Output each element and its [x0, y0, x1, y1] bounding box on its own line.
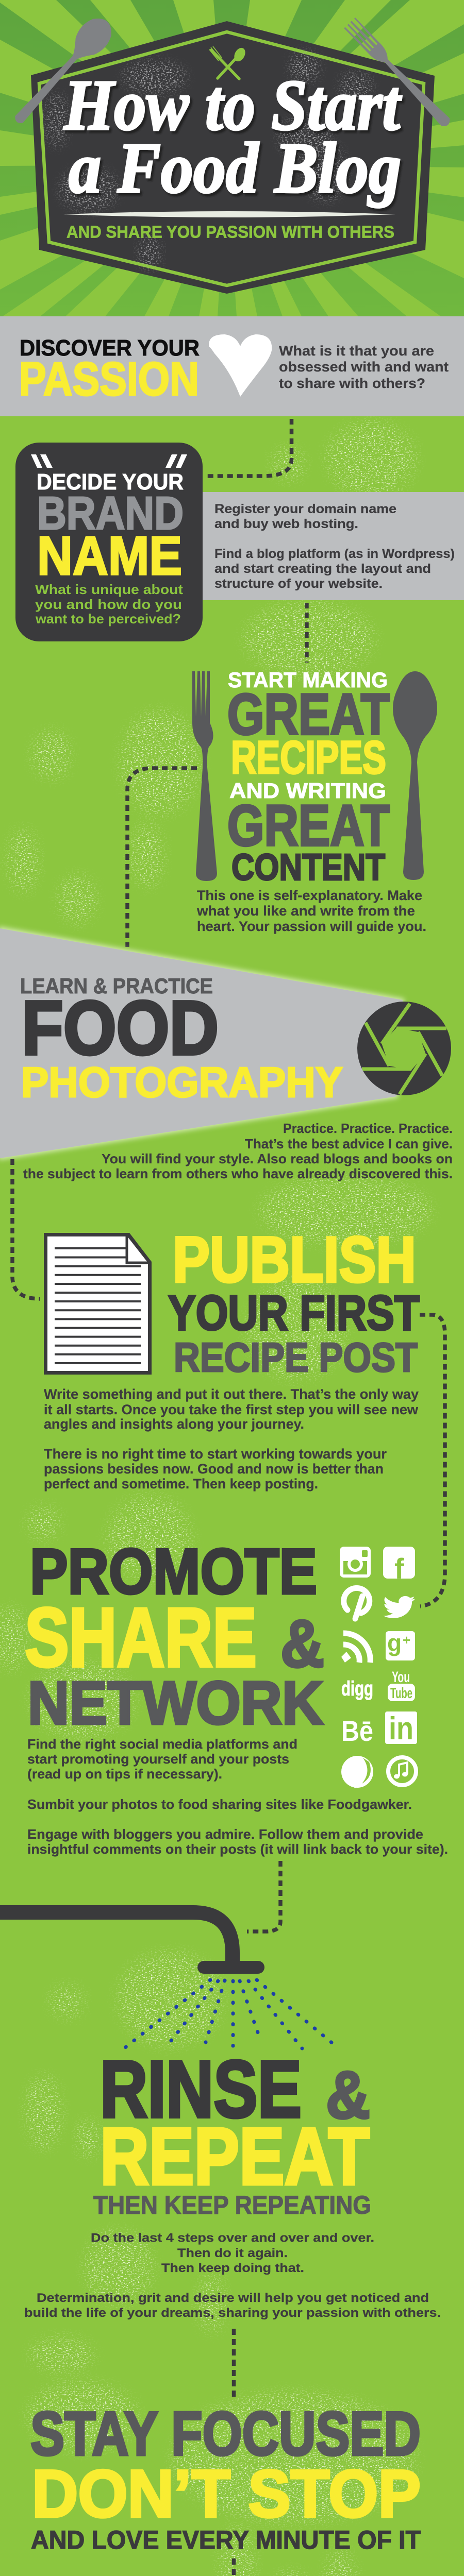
text block: (read up on tips if necessary).	[27, 1766, 222, 1782]
icon: google plus	[386, 1630, 415, 1660]
panel: promote share network	[25, 1536, 448, 1857]
heading: START MAKING	[228, 668, 388, 692]
heading: GREAT	[227, 793, 390, 858]
sunburst rays	[0, 0, 464, 316]
text block: This one is self-explanatory. Make	[197, 888, 422, 903]
heading: DECIDE YOUR	[37, 470, 184, 495]
text block	[214, 502, 455, 591]
question text: you and how do you	[35, 597, 182, 612]
icon: speech bubble	[341, 1756, 373, 1788]
icon: small crossed fork and spoon	[209, 46, 247, 79]
heading: NAME	[37, 526, 182, 586]
arrow: dotted connector 1	[206, 419, 292, 476]
text block: Determination, grit and desire will help you get noticed and	[37, 2291, 429, 2305]
heading: PROMOTE	[30, 1536, 317, 1607]
arrow: dotted connector 4	[12, 1159, 40, 1299]
text block	[44, 1386, 419, 1492]
icon: itunes	[388, 1757, 416, 1785]
icon: heart	[209, 334, 272, 397]
heading: PUBLISH	[173, 1224, 416, 1296]
panel: great recipes and content	[192, 668, 437, 934]
swoosh divider	[63, 211, 395, 217]
icon: youtube: Tube	[390, 1685, 412, 1702]
heading: RECIPE POST	[174, 1334, 418, 1380]
heading	[227, 668, 390, 888]
icon: youtube: You	[392, 1669, 410, 1686]
panel: discover your passion	[0, 316, 464, 416]
panel: stay focused: AND LOVE EVERY MINUTE OF IT	[31, 2526, 421, 2554]
heading	[20, 974, 343, 1106]
question text: What is unique about	[35, 582, 183, 597]
icon: google plus: g	[387, 1630, 402, 1656]
text block: and start creating the layout and	[214, 562, 431, 576]
icon: camera aperture	[357, 1002, 451, 1095]
title text: a Food Blog	[69, 128, 401, 208]
icon: large fork	[344, 18, 454, 130]
icon: behance: Bē	[341, 1715, 373, 1747]
text block: Do the last 4 steps over and over and over.	[91, 2231, 374, 2245]
text block: There is no right time to start working towards your	[44, 1446, 387, 1462]
panel: publish	[44, 1224, 420, 1492]
hexagon badge	[31, 21, 435, 294]
text block: and buy web hosting.	[214, 517, 358, 531]
heading	[37, 470, 184, 586]
text block: heart. Your passion will guide you.	[197, 919, 426, 934]
heading: NETWORK	[28, 1669, 323, 1737]
heading: GREAT	[227, 682, 390, 747]
text block: what you like and write from the	[196, 903, 415, 919]
arrow: dotted connector 7	[232, 2329, 236, 2398]
icon: facebook: f	[394, 1552, 404, 1585]
heading: PHOTOGRAPHY	[21, 1058, 343, 1106]
text block: practice: You will find your style. Also read blogs and books on	[102, 1151, 453, 1166]
text block: Find the right social media platforms and	[27, 1736, 297, 1752]
heading: BRAND	[37, 488, 184, 539]
icon: large spoon	[5, 11, 119, 132]
title text: How to Start	[63, 65, 402, 145]
text block: build the life of your dreams, sharing your passion with others.	[24, 2306, 441, 2320]
icon: twitter	[383, 1596, 415, 1618]
social icons	[340, 1547, 417, 1788]
heading: REPEAT	[100, 2111, 370, 2202]
icon: digg: digg	[341, 1677, 373, 1700]
text block: it all starts. Once you take the first step you will see new	[44, 1402, 419, 1417]
heading: FOOD	[22, 986, 219, 1071]
text block: obsessed with and want	[279, 359, 449, 375]
icon: pinterest	[344, 1588, 370, 1619]
heading: THEN KEEP REPEATING	[93, 2191, 371, 2219]
text block: to share with others?	[279, 376, 425, 391]
text block: Find a blog platform (as in Wordpress)	[214, 547, 455, 561]
arrow: dotted connector 3	[127, 768, 197, 947]
panel: food photography	[0, 928, 451, 1158]
text block	[279, 343, 449, 391]
text block: Register your domain name	[214, 502, 396, 516]
question text: want to be perceived?	[35, 611, 181, 626]
heading: LEARN & PRACTICE	[20, 974, 213, 998]
title badge	[5, 11, 454, 294]
heading	[25, 1536, 324, 1737]
heading: SHARE	[25, 1591, 257, 1684]
arrow: dotted connector 6	[247, 1861, 280, 1931]
text block: Write something and put it out there. That’s the only way	[44, 1386, 419, 1402]
subtitle: AND SHARE YOU PASSION WITH OTHERS	[67, 223, 394, 241]
text block: Then keep doing that.	[161, 2261, 304, 2275]
icon: rss	[341, 1633, 370, 1663]
heading: YOUR FIRST	[168, 1285, 420, 1341]
icon: fork	[192, 671, 217, 881]
text block: insightful comments on their posts (it will link back to your site).	[27, 1841, 448, 1857]
badge chalk texture	[46, 53, 371, 268]
arrow: dotted connector 8	[232, 2558, 236, 2576]
icon: quotation marks	[31, 454, 187, 468]
panel: decide your brand name	[15, 443, 203, 641]
heading: &	[280, 1606, 324, 1681]
text block: structure of your website.	[214, 577, 383, 591]
heading: PASSION	[19, 353, 199, 405]
icon: linkedin: in	[389, 1711, 413, 1747]
heading	[19, 336, 200, 405]
heading: RINSE	[100, 2044, 302, 2134]
chalk texture	[0, 422, 430, 2576]
text block: practice: the subject to learn from others who have already discovered this.	[23, 1166, 453, 1181]
panel: rinse and repeat	[0, 1912, 441, 2320]
arrow: dotted connector 5	[420, 1315, 445, 1606]
heading: &	[326, 2057, 370, 2132]
text block: Then do it again.	[177, 2246, 288, 2260]
icon: spoon	[393, 671, 437, 880]
panel: stay focused	[30, 2399, 421, 2554]
text block: Engage with bloggers you admire. Follow them and provide	[27, 1826, 423, 1842]
text block	[27, 1736, 448, 1857]
text block: practice: That’s the best advice I can give.	[245, 1136, 453, 1151]
heading	[93, 2044, 371, 2219]
panel: domain and hosting text	[203, 492, 464, 600]
beam	[0, 928, 403, 1158]
title text	[63, 65, 402, 208]
heading: RECIPES	[231, 732, 386, 784]
text block: What is it that you are	[279, 343, 434, 359]
icon: google plus: +	[403, 1632, 410, 1648]
text block: practice	[23, 1121, 453, 1181]
panel: stay focused: DON’T STOP	[32, 2456, 421, 2531]
text block: practice: Practice. Practice. Practice.	[283, 1121, 453, 1136]
text block	[24, 2231, 441, 2320]
question text	[35, 582, 183, 626]
badge inner outline	[39, 32, 424, 285]
heading: AND WRITING	[229, 778, 386, 803]
icon: document	[44, 1233, 152, 1375]
heading	[168, 1224, 420, 1380]
beam glow	[0, 928, 403, 1158]
arrow: dotted connector 2	[305, 603, 309, 663]
text block: passions besides now. Good and now is better than	[44, 1461, 384, 1477]
heading: DISCOVER YOUR	[20, 336, 200, 361]
icon: shower	[0, 1912, 339, 2049]
icon: instagram	[340, 1547, 371, 1578]
text block: angles and insights along your journey.	[44, 1416, 304, 1432]
text block: start promoting yourself and your posts	[27, 1751, 289, 1767]
text block: Sumbit your photos to food sharing sites like Foodgawker.	[27, 1797, 412, 1812]
text block	[196, 888, 426, 934]
text block: perfect and sometime. Then keep posting.	[44, 1476, 318, 1492]
heading: CONTENT	[231, 847, 385, 888]
icon: facebook	[383, 1547, 415, 1585]
icon: youtube	[388, 1669, 415, 1702]
